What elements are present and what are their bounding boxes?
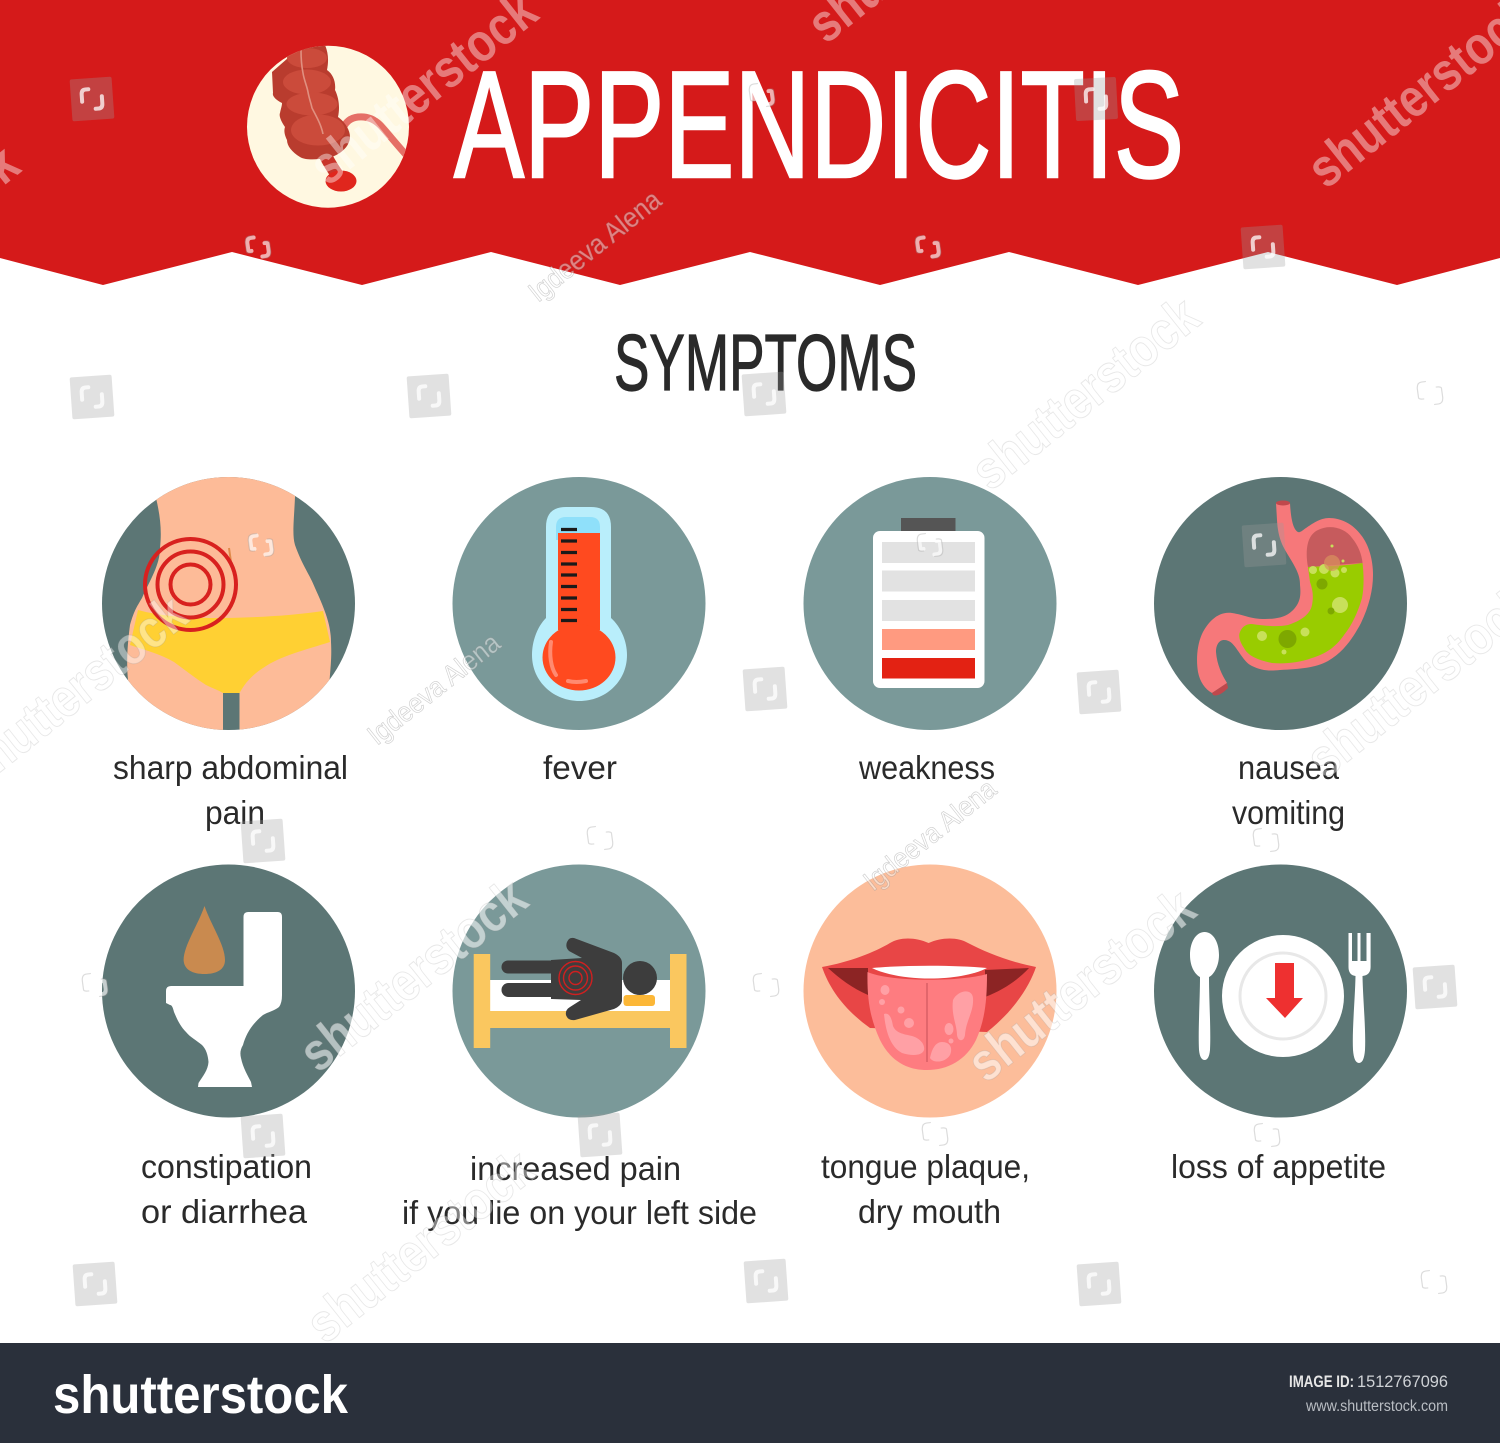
watermark overlay: shutterstock (288, 867, 539, 1083)
label: constipation or diarrhea: or diarrhea (141, 1193, 308, 1230)
label: sharp abdominal pain: pain (205, 794, 265, 831)
icon: thermometer (452, 477, 706, 730)
footer image id: www.shutterstock.com (1305, 1398, 1448, 1415)
label: increased pain if you lie on your left side (402, 1150, 757, 1231)
icon: tongue and lips (804, 864, 1056, 1118)
label: nausea vomiting: nausea (1238, 749, 1340, 786)
label: fever: fever (543, 749, 617, 786)
icon: low battery (804, 477, 1056, 730)
label: increased pain if you lie on your left side: increased pain (470, 1150, 681, 1187)
label: constipation or diarrhea: constipation (141, 1148, 312, 1185)
title: APPENDICITIS (454, 40, 1184, 210)
label: weakness: weakness (858, 749, 995, 786)
watermark overlay: Igdeeva Alena (522, 184, 667, 308)
footer logo: shutterstock (53, 1365, 349, 1425)
label: tongue plaque, dry mouth (821, 1148, 1030, 1230)
label: loss of appetite: loss of appetite (1171, 1148, 1386, 1185)
label: nausea vomiting (1232, 749, 1345, 831)
icon: person lying on bed (452, 864, 706, 1118)
footer image id: IMAGE ID: (1289, 1372, 1354, 1391)
label: increased pain if you lie on your left side: if you lie on your left side (402, 1194, 757, 1231)
watermark overlay: shutterstock (960, 285, 1211, 501)
footer bar (0, 1343, 1500, 1443)
red header banner (0, 0, 1500, 285)
watermark overlay: shutterstock (956, 877, 1207, 1093)
footer image id (1289, 1372, 1448, 1415)
watermark overlay: Igdeeva Alena (361, 627, 506, 751)
watermark overlay: Igdeeva Alena (857, 773, 1002, 897)
icon: abdominal pain (102, 470, 355, 740)
label: constipation or diarrhea (141, 1148, 312, 1230)
label: sharp abdominal pain: sharp abdominal (113, 749, 348, 786)
icon: appendix in cream circle (247, 45, 409, 208)
label: sharp abdominal pain (113, 749, 348, 831)
icon: stomach (1154, 477, 1407, 730)
icon: toilet (102, 864, 355, 1118)
label: tongue plaque, dry mouth: dry mouth (858, 1193, 1001, 1230)
footer image id: 1512767096 (1357, 1372, 1448, 1391)
label: nausea vomiting: vomiting (1232, 794, 1345, 831)
watermark overlay: shutterstock (295, 1138, 546, 1354)
label: tongue plaque, dry mouth: tongue plaque, (821, 1148, 1030, 1185)
heading: symptoms: SYMPTOMS (614, 318, 917, 407)
icon: plate with down arrow (1154, 864, 1407, 1118)
